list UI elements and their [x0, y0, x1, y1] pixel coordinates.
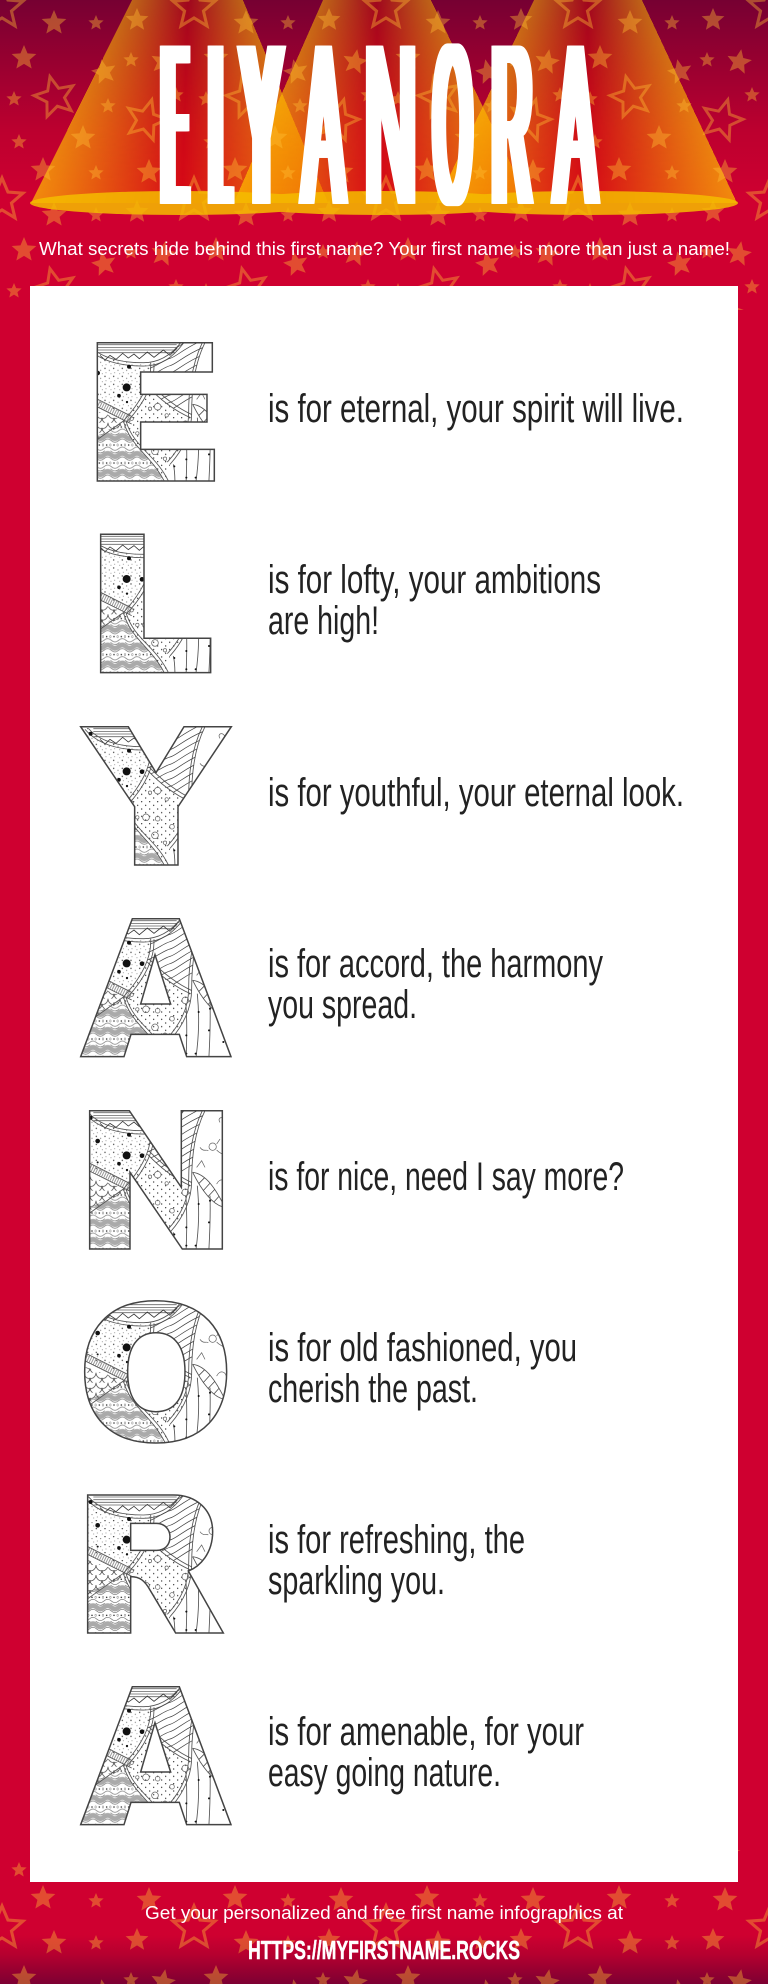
title: N	[360, 0, 411, 255]
text: A (second): is for amenable, for your	[268, 1710, 584, 1754]
text: L: are high!	[268, 599, 379, 643]
letter R	[86, 1494, 224, 1634]
title: A	[298, 0, 338, 255]
spotlight cone: centre	[234, 0, 516, 203]
letter Y	[79, 726, 233, 866]
letter A	[80, 918, 232, 1058]
letter E	[96, 342, 216, 482]
text: R: is for refreshing, the	[268, 1518, 525, 1562]
text: L: is for lofty, your ambitions	[268, 558, 601, 602]
footer url: HTTPS://MYFIRSTNAME.ROCKS	[248, 1935, 520, 1965]
spotlight pools of light	[30, 191, 738, 215]
subtitle: What secrets hide behind this first name? Your first name is more than just a name!	[39, 238, 730, 259]
text: A: you spread.	[268, 983, 417, 1027]
text: A: is for accord, the harmony	[268, 942, 603, 986]
letter N	[88, 1110, 224, 1250]
text: O	[268, 1326, 577, 1411]
title: O	[429, 0, 466, 255]
text: O: is for old fashioned, you	[268, 1326, 577, 1370]
text: A	[268, 942, 603, 1027]
text: R: sparkling you.	[268, 1559, 445, 1603]
title: Y	[235, 0, 274, 255]
title: L	[205, 0, 222, 255]
star pattern: header	[0, 0, 768, 310]
text: R	[268, 1518, 525, 1603]
title: E	[157, 0, 180, 255]
text: L	[268, 558, 601, 643]
letter A (second)	[80, 1686, 232, 1826]
white content panel	[30, 286, 738, 1882]
letter O	[84, 1300, 228, 1444]
spotlight cone: right	[436, 0, 737, 203]
spotlight cone: left	[32, 0, 324, 203]
title	[157, 0, 601, 255]
text: A (second): easy going nature.	[268, 1751, 501, 1795]
text: N: is for nice, need I say more?	[268, 1155, 624, 1199]
title: A	[550, 0, 590, 255]
text: O: cherish the past.	[268, 1367, 478, 1411]
text: A (second)	[268, 1710, 584, 1795]
title: R	[487, 0, 526, 255]
footer line: Get your personalized and free first name infographics at	[145, 1903, 623, 1923]
letter L	[100, 534, 212, 674]
star pattern: footer	[0, 1850, 768, 1984]
